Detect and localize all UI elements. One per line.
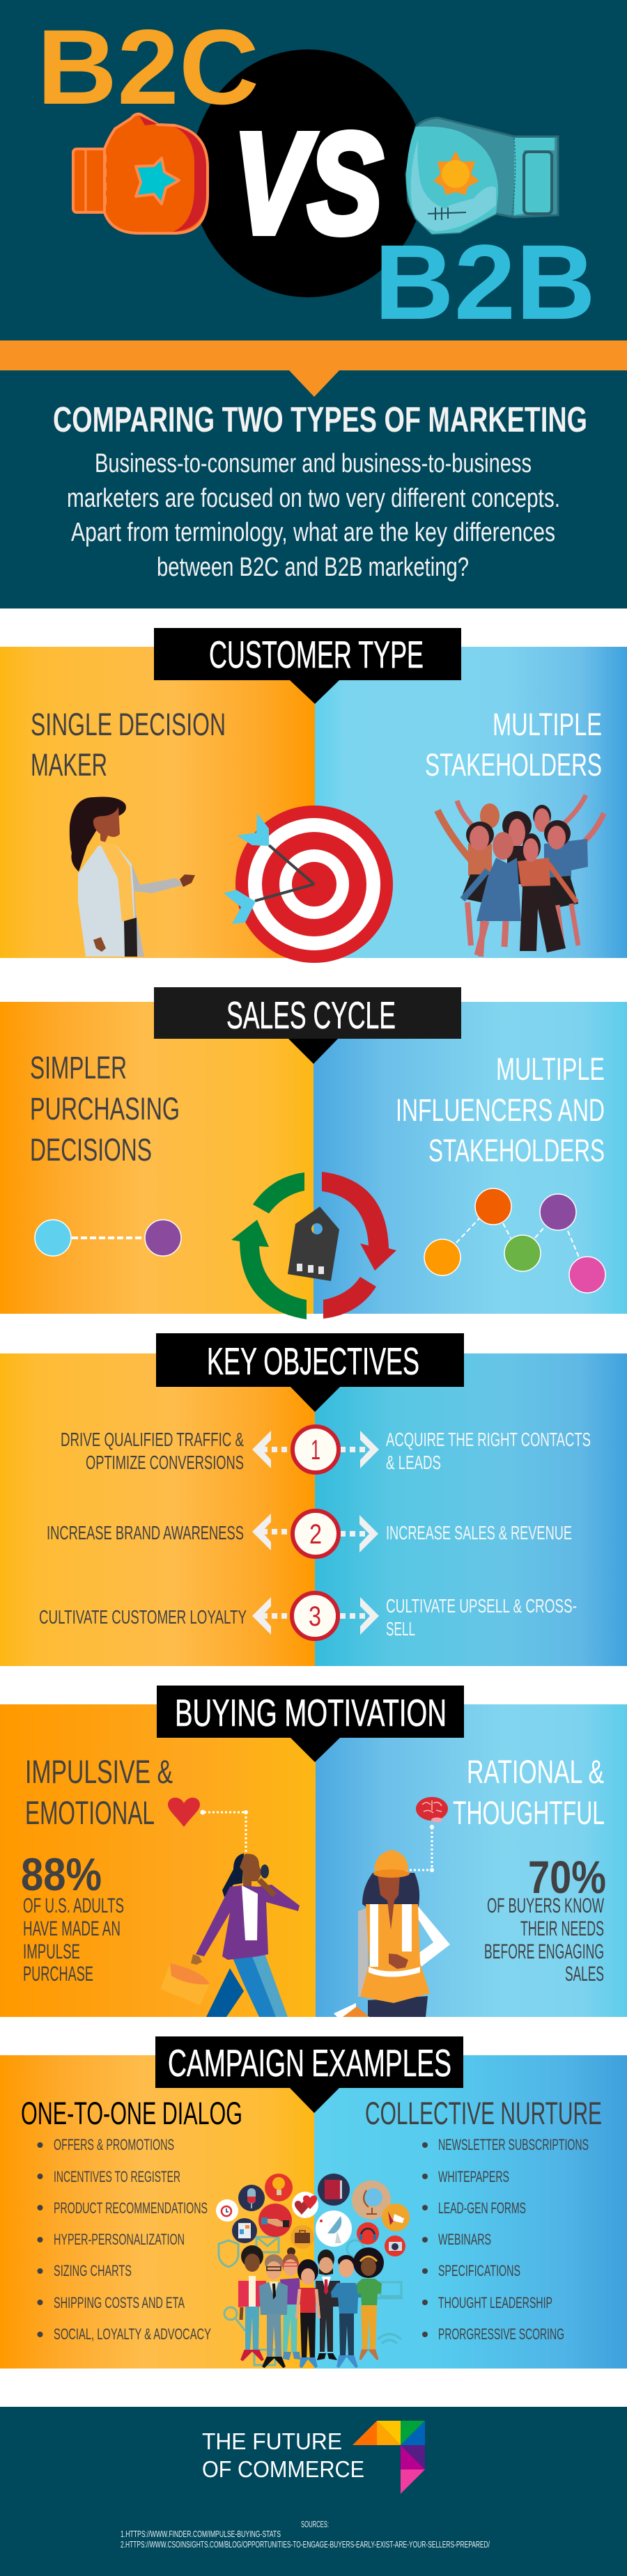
list: B2C campaigns: PRODUCT RECOMMENDATIONS bbox=[54, 2199, 208, 2217]
text: 88% caption: OF U.S. ADULTS bbox=[23, 1894, 124, 1917]
B2C objectives bbox=[39, 1429, 247, 1628]
panel: key objectives bbox=[0, 1333, 627, 1666]
icon: heart bbox=[168, 1798, 200, 1827]
B2C label: SIMPLER bbox=[30, 1050, 127, 1085]
B2B objectives bbox=[386, 1429, 591, 1640]
logo wordmark: the future of commerce: THE FUTURE bbox=[202, 2428, 342, 2454]
right half: B2B bbox=[315, 1353, 627, 1666]
panel: customer type bbox=[0, 628, 627, 963]
icon: briefcase bbox=[291, 2225, 314, 2249]
icon: alarm clock bbox=[216, 2199, 238, 2222]
icon: woman in lab coat bbox=[70, 796, 195, 957]
panel: buying motivation bbox=[0, 1686, 627, 2017]
B2C objectives: CULTIVATE CUSTOMER LOYALTY bbox=[39, 1606, 247, 1628]
panel: sales cycle bbox=[0, 987, 627, 1319]
person: man in dark suit bbox=[316, 2249, 341, 2360]
icon: newspaper bbox=[232, 2218, 257, 2243]
list: B2B campaigns: THOUGHT LEADERSHIP bbox=[438, 2294, 552, 2311]
logo mark: coloured triangles bbox=[353, 2421, 425, 2494]
sources: 1.HTTPS://WWW.FINDER.COM/IMPULSE-BUYING-STATS bbox=[121, 2529, 281, 2539]
left half: B2C bbox=[0, 1353, 315, 1666]
person: woman in green bbox=[353, 2247, 384, 2359]
B2C label bbox=[31, 707, 226, 783]
illustration: construction worker bbox=[334, 1850, 450, 2017]
header tab: customer type bbox=[154, 628, 461, 704]
header tab: buying motivation bbox=[157, 1686, 464, 1762]
icon: handshake bbox=[258, 2204, 292, 2237]
icon: microphone bbox=[238, 2185, 265, 2211]
B2C label: SINGLE DECISION bbox=[31, 707, 226, 742]
icon: light bulb bbox=[265, 2174, 293, 2201]
B2C objectives: DRIVE QUALIFIED TRAFFIC & bbox=[61, 1429, 244, 1450]
icon: bullseye target with arrows bbox=[224, 806, 393, 963]
icon: headphones bbox=[357, 2222, 379, 2245]
B2C label bbox=[30, 1050, 180, 1168]
B2C label: IMPULSIVE & bbox=[25, 1753, 173, 1790]
list: B2B campaigns: LEAD-GEN FORMS bbox=[438, 2199, 526, 2217]
logo wordmark: the future of commerce bbox=[202, 2428, 364, 2482]
list: B2C campaigns: OFFERS & PROMOTIONS bbox=[54, 2136, 174, 2153]
text: 88% caption: HAVE MADE AN bbox=[23, 1917, 121, 1940]
icon cluster: marketing channels bbox=[216, 2174, 410, 2256]
list: B2C campaigns: SOCIAL, LOYALTY & ADVOCACY bbox=[54, 2325, 211, 2343]
person: man in grey suit bbox=[259, 2254, 288, 2367]
B2B objectives: SELL bbox=[386, 1618, 415, 1640]
orange band with pointer bbox=[0, 340, 627, 397]
list: B2C campaigns: SHIPPING COSTS AND ETA bbox=[54, 2294, 185, 2311]
list: B2B campaigns: WEBINARS bbox=[438, 2231, 491, 2248]
title: VS: VS bbox=[233, 104, 382, 263]
arrows and number 3: 3 bbox=[309, 1601, 321, 1632]
right half: B2B bbox=[314, 1002, 627, 1314]
diagram: two connected nodes bbox=[35, 1220, 181, 1256]
B2C label bbox=[25, 1753, 173, 1831]
faint background icons bbox=[219, 2237, 403, 2365]
statistic: 70%: 70% bbox=[528, 1851, 606, 1903]
header label: CAMPAIGN EXAMPLES bbox=[168, 2041, 451, 2084]
heading: one-to-one dialog: ONE-TO-ONE DIALOG bbox=[21, 2096, 242, 2131]
intro text: between B2C and B2B marketing? bbox=[157, 553, 469, 582]
person: man in red jacket bbox=[238, 2245, 266, 2360]
right half: B2B bbox=[314, 2055, 627, 2369]
diagram: network of many nodes bbox=[424, 1188, 605, 1293]
header tab: sales cycle bbox=[154, 987, 461, 1064]
B2B label bbox=[425, 707, 602, 783]
sources: SOURCES: bbox=[301, 2519, 329, 2529]
icon: camera bbox=[385, 2236, 405, 2256]
header tab: key objectives bbox=[156, 1333, 464, 1412]
illustration: group of seven people bbox=[238, 2245, 384, 2367]
header label: BUYING MOTIVATION bbox=[175, 1691, 447, 1734]
list: B2C campaigns: INCENTIVES TO REGISTER bbox=[54, 2168, 180, 2185]
text: 88% caption: PURCHASE bbox=[23, 1963, 93, 1986]
icon: brain bbox=[416, 1797, 448, 1823]
B2B objectives: & LEADS bbox=[386, 1452, 441, 1473]
icon: notebook bbox=[318, 2174, 350, 2206]
title: B2C: B2C bbox=[37, 8, 259, 127]
title: B2B: B2B bbox=[374, 223, 596, 342]
panel: hero bbox=[0, 0, 627, 608]
intro text bbox=[67, 449, 560, 582]
icon: black circle bbox=[191, 49, 425, 297]
arrows and number 3 bbox=[252, 1593, 379, 1639]
header label: CUSTOMER TYPE bbox=[209, 633, 424, 676]
arrows and number 1: 1 bbox=[311, 1435, 320, 1466]
left half: B2C bbox=[0, 1704, 316, 2017]
icon: price tag in cycle arrows bbox=[231, 1172, 396, 1319]
logo wordmark: the future of commerce: OF COMMERCE bbox=[202, 2456, 364, 2482]
header label: KEY OBJECTIVES bbox=[207, 1340, 419, 1383]
statistic: 88%: 88% bbox=[21, 1848, 102, 1900]
list: B2C campaigns bbox=[38, 2136, 211, 2343]
icon: hearts bbox=[292, 2192, 318, 2218]
icon: group of cheering women bbox=[438, 795, 604, 957]
B2B label bbox=[453, 1753, 605, 1831]
sources bbox=[121, 2519, 490, 2550]
icon: teal boxing glove bbox=[406, 118, 558, 234]
text: 88% caption: IMPULSE bbox=[23, 1940, 80, 1963]
B2C label: DECISIONS bbox=[30, 1132, 152, 1168]
arrows and number 2 bbox=[252, 1511, 378, 1557]
person: woman in purple bbox=[280, 2247, 300, 2360]
left half: B2C bbox=[0, 647, 315, 958]
B2C objectives: INCREASE BRAND AWARENESS bbox=[47, 1522, 244, 1544]
dotted connector: brain to worker bbox=[386, 1825, 434, 1872]
right half: B2B bbox=[316, 1704, 627, 2017]
icon: globe bbox=[352, 2181, 391, 2220]
B2C objectives: OPTIMIZE CONVERSIONS bbox=[86, 1452, 244, 1473]
right half: B2B bbox=[315, 647, 627, 958]
header tab: campaign examples bbox=[155, 2036, 463, 2113]
panel: footer bbox=[0, 2407, 627, 2576]
header label: SALES CYCLE bbox=[226, 994, 396, 1037]
B2C label: PURCHASING bbox=[30, 1091, 180, 1126]
list: B2B campaigns: WHITEPAPERS bbox=[438, 2168, 509, 2185]
B2C label: MAKER bbox=[31, 747, 107, 783]
text: 88% caption bbox=[23, 1894, 124, 1986]
person: woman in red top bbox=[297, 2259, 319, 2367]
list: B2B campaigns bbox=[422, 2136, 589, 2343]
B2B label bbox=[396, 1051, 605, 1168]
B2C label: EMOTIONAL bbox=[25, 1794, 155, 1831]
arrows and number 1 bbox=[252, 1427, 379, 1472]
list: B2B campaigns: SPECIFICATIONS bbox=[438, 2262, 520, 2279]
panel: campaign examples bbox=[0, 2036, 627, 2369]
left half: B2C bbox=[0, 1002, 314, 1314]
list: B2C campaigns: HYPER-PERSONALIZATION bbox=[54, 2231, 185, 2248]
icon: orange boxing glove bbox=[73, 114, 208, 233]
icon: satellite dish bbox=[316, 2210, 352, 2247]
list: B2C campaigns: SIZING CHARTS bbox=[54, 2262, 132, 2279]
arrows and number 2: 2 bbox=[309, 1519, 322, 1550]
text: 70% caption bbox=[484, 1894, 604, 1986]
person: man in blue tee bbox=[331, 2255, 362, 2367]
dotted connector: heart to woman bbox=[201, 1810, 248, 1855]
left half: B2C bbox=[0, 2055, 314, 2369]
illustration: woman on phone bbox=[160, 1853, 300, 2017]
icon: megaphone bbox=[382, 2204, 410, 2231]
